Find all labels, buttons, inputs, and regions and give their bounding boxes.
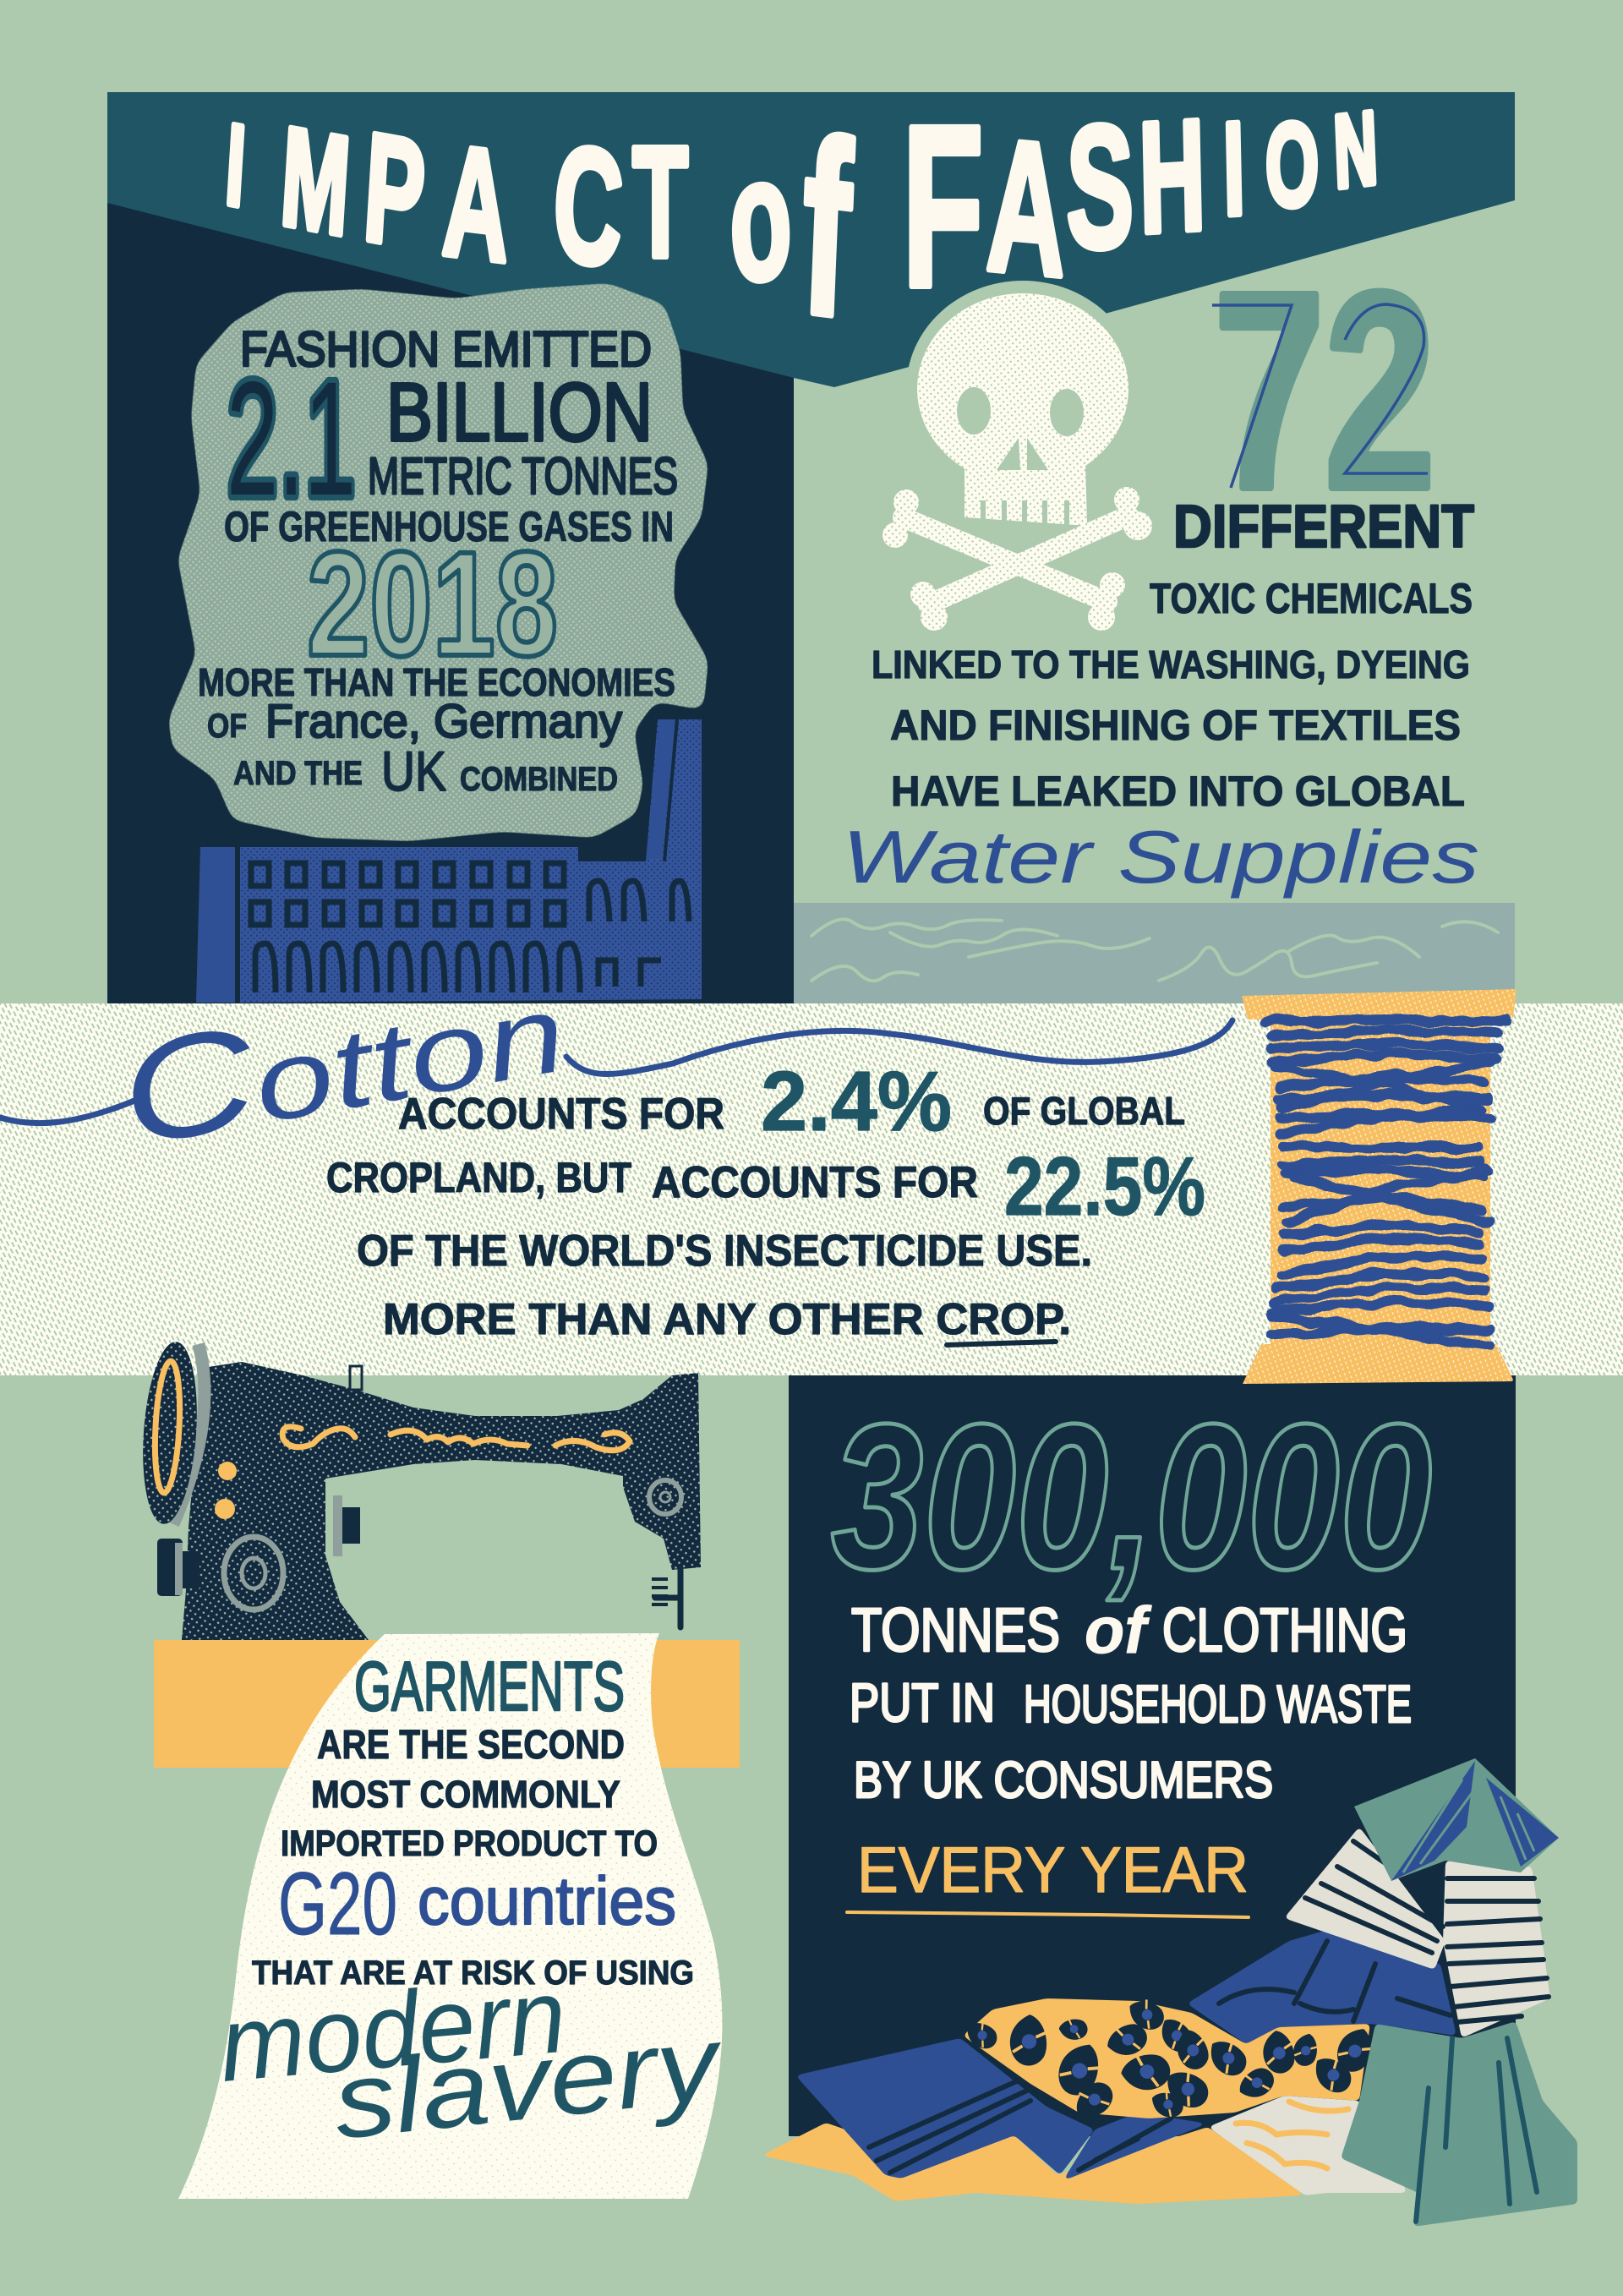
- blue thread windings: [1265, 1020, 1506, 1344]
- cloud text: [198, 322, 678, 802]
- chemical text: [842, 494, 1479, 899]
- heading: cotton: Cotton: [108, 942, 576, 1177]
- panel: garments paper: [178, 1633, 730, 2199]
- icon: skull and crossbones: [883, 281, 1152, 631]
- figure: 2018: 2018: [307, 522, 558, 687]
- clothing waste text: HOUSEHOLD WASTE: [1024, 1676, 1412, 1734]
- cotton statistics text: OF GLOBAL: [983, 1089, 1185, 1133]
- title: F: [902, 79, 984, 336]
- garments text: modern: [215, 1957, 571, 2104]
- title: A: [440, 112, 512, 296]
- title: O: [1265, 99, 1319, 232]
- clothing waste text: TONNES: [851, 1597, 1060, 1665]
- cloth: leopard print: [962, 1996, 1376, 2126]
- cloth: blue top: [1187, 1930, 1456, 2044]
- figure: 300,000: 300,000: [831, 1380, 1432, 1612]
- title: I: [1221, 96, 1246, 243]
- chemical text: HAVE LEAKED INTO GLOBAL: [891, 768, 1465, 815]
- cloud text: COMBINED: [460, 761, 618, 798]
- icon: thread spool: [1242, 989, 1516, 1384]
- cotton statistics text: 2.4%: [761, 1054, 952, 1149]
- cloud text: AND THE: [233, 755, 363, 792]
- yellow table top: [154, 1640, 740, 1768]
- illustration: pile of clothes: [761, 1758, 1577, 2227]
- cotton statistics text: 22.5%: [1004, 1140, 1205, 1233]
- cotton statistics text: CROPLAND, BUT: [326, 1154, 631, 1201]
- cotton statistics text: MORE THAN ANY OTHER CROP.: [383, 1295, 1071, 1344]
- title: A: [984, 101, 1069, 316]
- cotton statistics text: ACCOUNTS FOR: [398, 1090, 724, 1139]
- cotton statistics text: ACCOUNTS FOR: [652, 1158, 978, 1207]
- panel: dark emissions background: [107, 194, 794, 1003]
- chemical text: DIFFERENT: [1173, 494, 1474, 560]
- clothing waste text: [831, 1380, 1432, 1917]
- cloud text: FASHION EMITTED: [240, 322, 652, 377]
- chemical text: TOXIC CHEMICALS: [1150, 575, 1473, 622]
- cotton thread swash: [0, 1020, 1232, 1123]
- cloud text: UK: [381, 740, 446, 802]
- cloth: white with yellow squiggles: [1208, 2096, 1407, 2195]
- garments text: GARMENTS: [354, 1647, 625, 1725]
- panel: cotton content: [0, 942, 1232, 1345]
- panel: title banner: [107, 92, 1515, 387]
- title: M: [277, 96, 354, 265]
- cloud text: OF: [207, 708, 247, 745]
- smoke cloud shape: [161, 275, 719, 850]
- fabric sheet: [178, 1633, 722, 2199]
- water band: [794, 903, 1515, 1003]
- cloud text: MORE THAN THE ECONOMIES: [198, 660, 675, 704]
- chemical text: Water Supplies: [842, 815, 1479, 899]
- title: S: [1066, 90, 1134, 284]
- title: N: [1332, 90, 1380, 210]
- title: f: [796, 87, 896, 370]
- title: C: [549, 109, 627, 303]
- cotton statistics text: OF THE WORLD'S INSECTICIDE USE.: [357, 1227, 1092, 1276]
- figure: 2.1: 2.1: [227, 347, 356, 529]
- garments text: slavery: [328, 2004, 730, 2162]
- cloth: striped top: [1284, 1827, 1550, 2038]
- cotton statistics text: [326, 1054, 1205, 1345]
- factory illustration: [196, 719, 702, 1003]
- title: H: [1138, 87, 1207, 266]
- title: P: [360, 100, 429, 282]
- panel: clothing waste: [789, 1375, 1516, 2136]
- icon: sewing machine: [138, 1340, 701, 1640]
- cloth: blue left: [795, 2038, 1208, 2181]
- cloud text: France, Germany: [265, 694, 622, 747]
- cloud text: BILLION: [386, 366, 653, 458]
- cloud text: METRIC TONNES: [368, 447, 678, 505]
- title: o: [725, 118, 795, 320]
- garments text: IMPORTED PRODUCT TO: [281, 1823, 658, 1864]
- clothing waste text: of: [1085, 1593, 1152, 1667]
- chemical text: LINKED TO THE WASHING, DYEING: [872, 642, 1470, 686]
- title: T: [632, 114, 713, 290]
- panel: toxic chemicals: [794, 234, 1515, 1003]
- cloth: green top with blue hatching: [1354, 1758, 1559, 1881]
- garments text: countries: [418, 1863, 676, 1938]
- garments text: G20: [278, 1855, 397, 1954]
- figure: 72: 72: [1214, 234, 1435, 546]
- garments text: [215, 1647, 730, 2162]
- clothing waste text: BY UK CONSUMERS: [854, 1752, 1273, 1808]
- cloth: green drape: [1341, 2021, 1577, 2227]
- garments text: MOST COMMONLY: [311, 1773, 620, 1816]
- clothing waste text: EVERY YEAR: [857, 1834, 1249, 1906]
- cloud text: OF GREENHOUSE GASES IN: [224, 503, 674, 550]
- cloth: yellow base: [761, 2123, 1305, 2204]
- chemical text: AND FINISHING OF TEXTILES: [890, 702, 1461, 749]
- panel: cotton band: [0, 1003, 1623, 1375]
- title: I: [222, 99, 249, 231]
- clothing waste text: PUT IN: [850, 1672, 995, 1733]
- garments text: ARE THE SECOND: [317, 1723, 625, 1768]
- clothing waste text: CLOTHING: [1162, 1597, 1407, 1665]
- panel: factory emissions cloud: [161, 275, 719, 1003]
- garments text: THAT ARE AT RISK OF USING: [252, 1954, 694, 1992]
